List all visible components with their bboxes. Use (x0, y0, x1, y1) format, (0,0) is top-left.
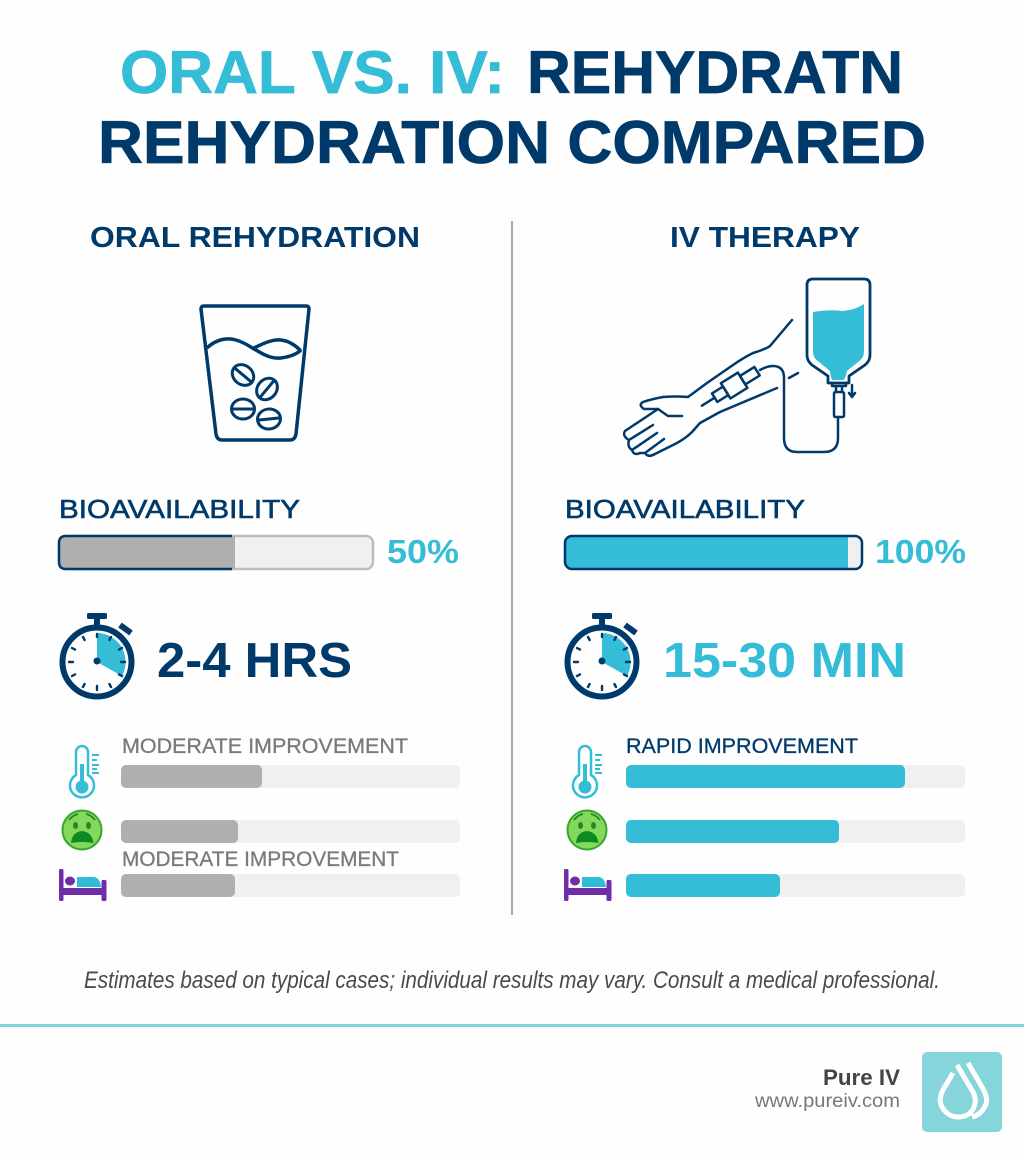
bar: nausea (121, 820, 460, 843)
bar: fever (121, 765, 460, 788)
icon: glass with pills (201, 306, 309, 440)
title: ORAL VS. IV: (120, 39, 505, 106)
title (98, 39, 926, 176)
bar: fatigue (626, 874, 965, 897)
panel: iv therapy (564, 222, 966, 901)
bar: 100% bioavailability (565, 536, 862, 569)
icon: nauseated face (568, 810, 606, 850)
bar: fever (626, 765, 965, 788)
icon: iv bag and arm (624, 279, 870, 456)
bar: 50% bioavailability (59, 536, 373, 569)
label: bioavailability: BIOAVAILABILITY (565, 494, 805, 524)
brand name: Pure IV (823, 1065, 900, 1090)
text: rapid improvement: RAPID IMPROVEMENT (626, 735, 858, 758)
icon: bed (564, 869, 612, 901)
value: 15-30 min: 15-30 MIN (663, 634, 906, 688)
icon: bed (59, 869, 106, 901)
text: moderate improvement second: MODERATE IMPROVEMENT (122, 848, 399, 871)
icon: thermometer (573, 746, 602, 797)
panel: oral rehydration (59, 222, 460, 901)
icon: nauseated face (62, 810, 102, 850)
label: bioavailability: BIOAVAILABILITY (59, 494, 300, 524)
icon: logo (922, 1052, 1002, 1132)
title: REHYDRATN (527, 39, 903, 106)
icon: stopwatch (62, 613, 132, 696)
title: REHYDRATION COMPARED (98, 109, 926, 176)
bar: fatigue (121, 874, 460, 897)
value: 100%: 100% (875, 533, 966, 570)
value: 2-4 hrs: 2-4 HRS (157, 634, 352, 688)
bar: nausea (626, 820, 965, 843)
heading: iv therapy: IV THERAPY (670, 222, 860, 254)
heading: oral rehydration: ORAL REHYDRATION (90, 222, 420, 254)
text: moderate improvement: MODERATE IMPROVEMENT (122, 735, 408, 758)
icon: stopwatch (568, 613, 636, 696)
value: 50%: 50% (387, 533, 459, 570)
icon: thermometer (70, 746, 99, 797)
brand url: www.pureiv.com (754, 1091, 900, 1112)
